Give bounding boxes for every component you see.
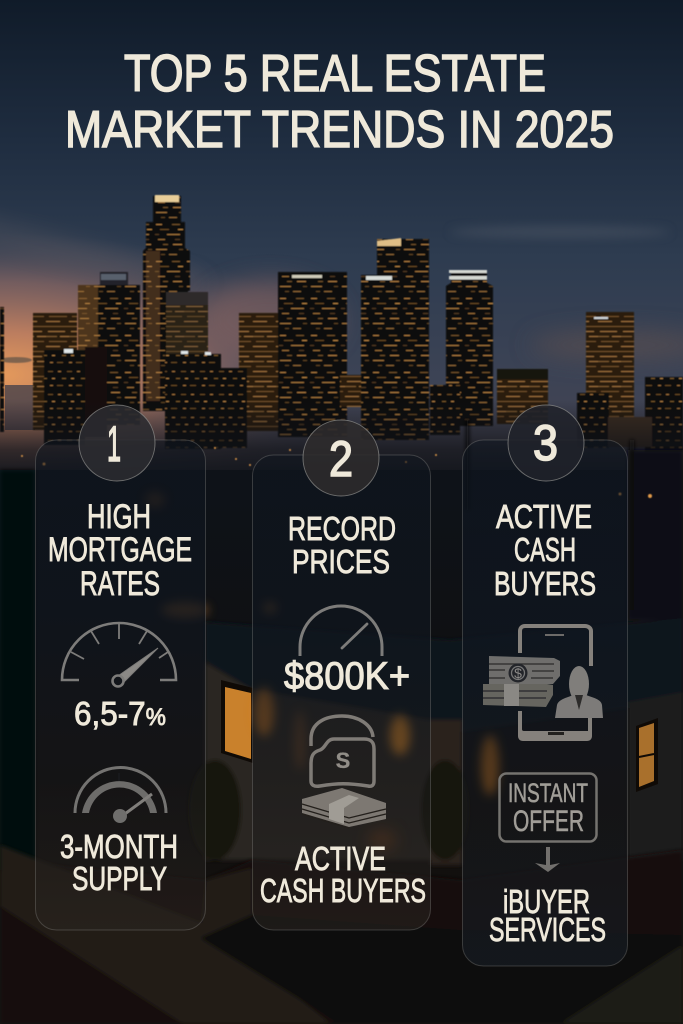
label: ibuyer services: iBUYER bbox=[503, 883, 590, 920]
value: price: $800K+ bbox=[284, 655, 410, 698]
heading: active cash buyers: BUYERS bbox=[494, 565, 596, 602]
label: active cash buyers: CASH BUYERS bbox=[260, 872, 426, 909]
icon: price gauge bbox=[300, 606, 382, 656]
label: 3-month supply bbox=[60, 828, 178, 897]
badge: number 3 bbox=[508, 405, 584, 481]
background: dusk sky bbox=[0, 0, 683, 470]
icon: supply gauge bbox=[75, 768, 166, 823]
icon: phone with cash and agent: $ bbox=[514, 665, 522, 681]
badge: number 3: 3 bbox=[533, 415, 558, 471]
heading: active cash buyers bbox=[494, 498, 596, 602]
title bbox=[65, 45, 614, 159]
skyline: downtown towers bbox=[0, 195, 683, 452]
heading: high mortgage rates bbox=[48, 498, 192, 603]
badge: number 1 bbox=[79, 405, 155, 481]
heading: high mortgage rates: HIGH bbox=[87, 498, 151, 536]
house walls bbox=[205, 662, 430, 860]
icon: instant offer badge bbox=[500, 774, 596, 842]
icon: instant offer badge: INSTANT bbox=[508, 778, 588, 808]
panel: record prices bbox=[252, 420, 430, 930]
heading: record prices: RECORD bbox=[288, 510, 396, 547]
badge: number 1: 1 bbox=[107, 416, 121, 472]
icon: cash stack bbox=[302, 788, 386, 828]
warm glows bbox=[254, 688, 274, 736]
main tower bbox=[143, 196, 190, 411]
shrubs bbox=[189, 760, 241, 860]
heading: high mortgage rates: RATES bbox=[80, 565, 160, 603]
panel: high mortgage rates bbox=[36, 405, 206, 930]
background: neighbourhood and house at night bbox=[0, 400, 683, 1024]
label: active cash buyers: ACTIVE bbox=[295, 840, 386, 877]
icon: lock with dollar bbox=[311, 716, 374, 786]
lawn and sidewalk bbox=[0, 845, 683, 1024]
panel: active cash buyers bbox=[462, 405, 628, 966]
label: ibuyer services bbox=[489, 883, 606, 948]
heading: active cash buyers: ACTIVE bbox=[496, 498, 592, 535]
label: ibuyer services: SERVICES bbox=[489, 911, 606, 948]
label: active cash buyers bbox=[260, 840, 426, 909]
heading: high mortgage rates: MORTGAGE bbox=[48, 531, 192, 569]
house windows bbox=[221, 680, 658, 792]
heading: record prices bbox=[288, 510, 396, 580]
arrow: down to ibuyer services bbox=[535, 847, 560, 872]
city lights bbox=[21, 447, 652, 498]
icon: lock with dollar: S bbox=[336, 748, 350, 773]
roofs bbox=[205, 618, 683, 735]
value: mortgage rate: 6,5-7% bbox=[74, 695, 166, 732]
badge: number 2 bbox=[303, 420, 379, 496]
title: TOP 5 REAL ESTATE bbox=[124, 45, 546, 103]
label: 3-month supply: SUPPLY bbox=[72, 860, 167, 897]
icon: phone with cash and agent bbox=[483, 626, 603, 741]
badge: number 2: 2 bbox=[329, 431, 353, 487]
icon: speedometer gauge bbox=[62, 623, 176, 686]
heading: active cash buyers: CASH bbox=[514, 531, 576, 568]
icon: instant offer badge: OFFER bbox=[513, 805, 584, 838]
label: 3-month supply: 3-MONTH bbox=[60, 828, 178, 865]
heading: record prices: PRICES bbox=[292, 543, 390, 580]
foreground blocks bbox=[44, 350, 85, 445]
